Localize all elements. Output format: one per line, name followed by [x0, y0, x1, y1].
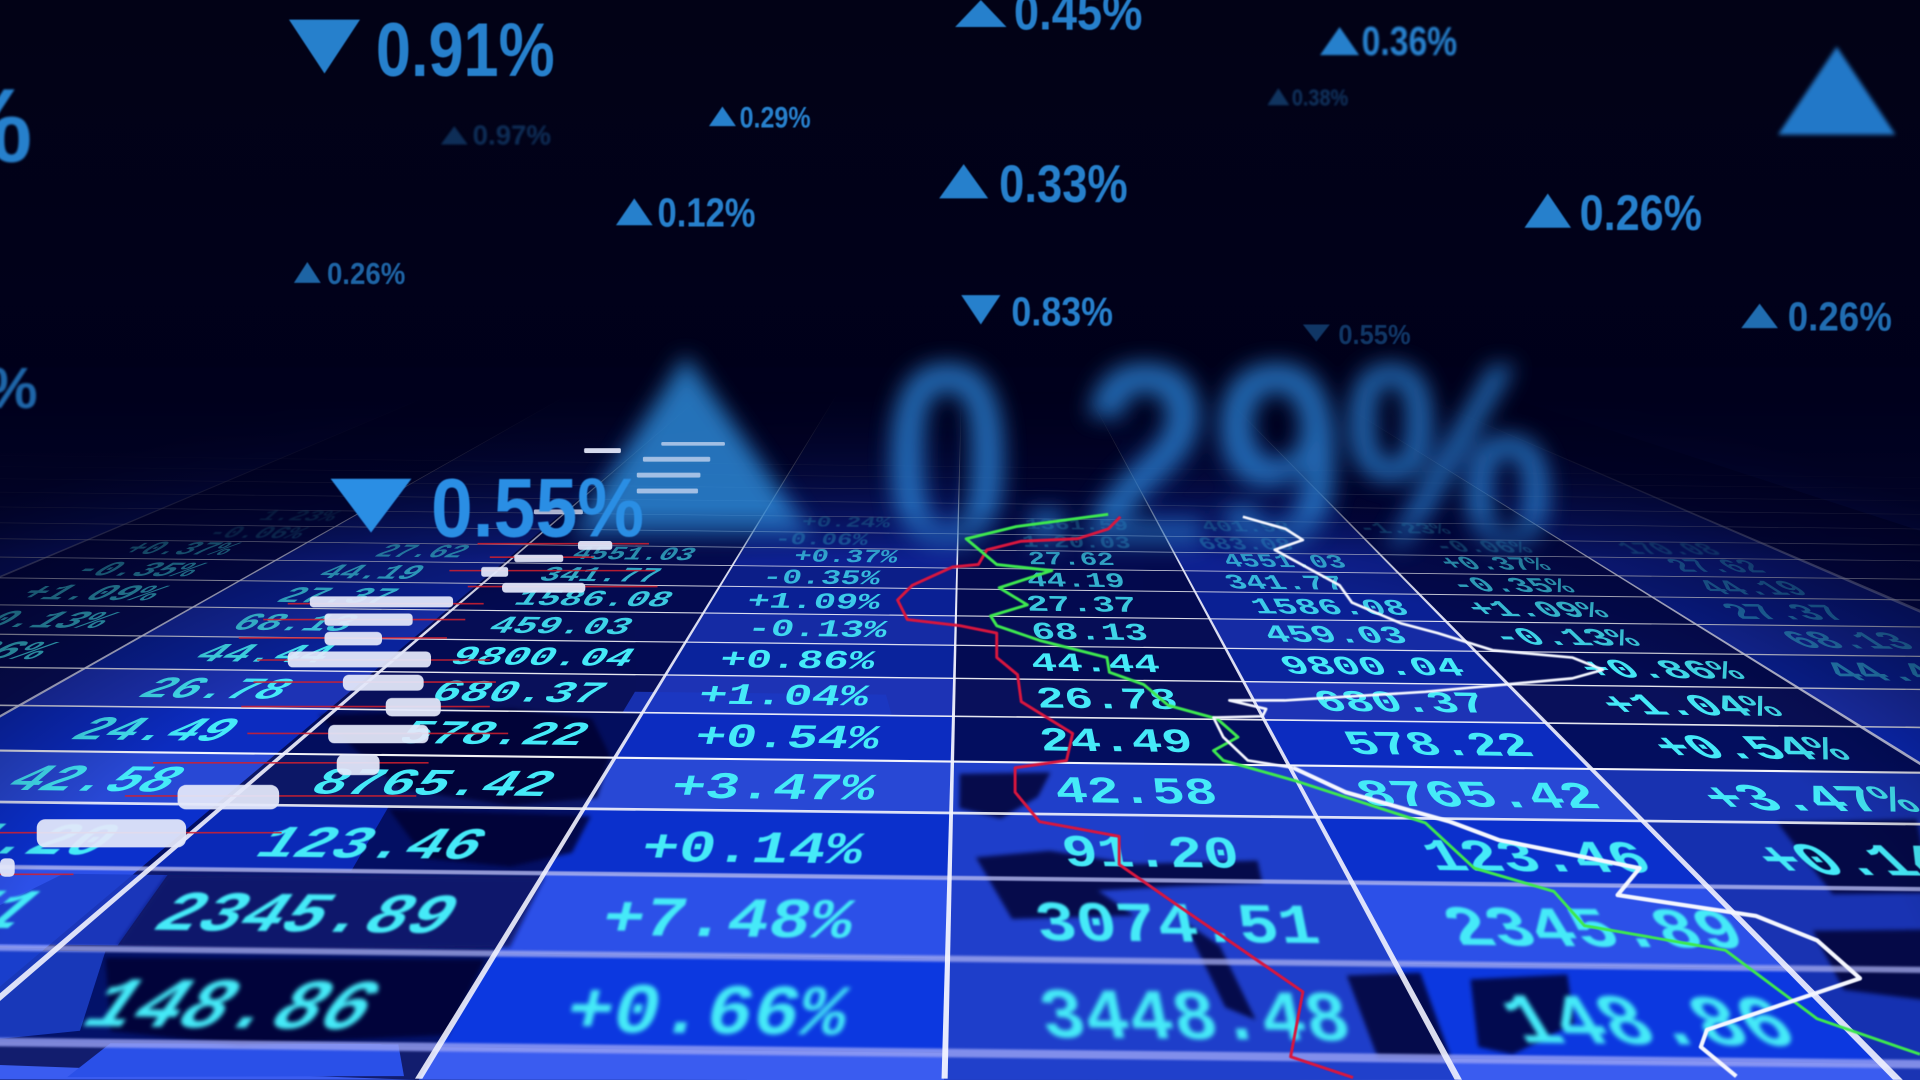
- faint table row: far rows: -0.06%: [773, 530, 871, 550]
- faint table row: far rows: -0.06%: [199, 523, 315, 544]
- table row: 68.13: 68.13: [220, 610, 368, 639]
- table row: 68.13: 68.13: [1029, 618, 1151, 648]
- table row: 44.44: 9800.04: [1274, 652, 1472, 684]
- table row: 3448.48: +0.66%: [557, 972, 857, 1056]
- giant blurred label: 0.29%: [565, 346, 1564, 562]
- alternating dark columns: [0, 442, 1920, 1080]
- table row: 91.20: 123.46: [242, 819, 500, 873]
- floating label: down 0.83%: 0.83%: [1011, 289, 1113, 335]
- world map: lighter land: [0, 684, 1920, 1080]
- table row: 44.44: 44.44: [1028, 648, 1163, 680]
- table row: 68.13: [0, 610, 1912, 650]
- table row: 44.19: 44.19: [1025, 569, 1127, 594]
- horizontal grid lines: [0, 451, 1920, 1069]
- floating label: up 0.26% far right: [1741, 294, 1892, 340]
- table row: 24.49: [71, 717, 1850, 760]
- faint table row: far rows: -0.06%: [1426, 537, 1540, 558]
- table row: 91.20: 123.46: [1412, 833, 1664, 887]
- floating label: large down 0.55%: [331, 461, 644, 554]
- floating label: faint up 0.97%: 0.97%: [473, 119, 551, 150]
- faint table row: far rows: 170.08: [1609, 540, 1732, 560]
- table row: 44.19: -0.35%: [1442, 574, 1583, 599]
- table row: 44.19: -0.35%: [760, 566, 883, 591]
- table row: 27.37: +1.09%: [1459, 597, 1618, 624]
- table row: 27.62: 27.62: [366, 541, 477, 563]
- table row: 24.49: +0.54%: [1640, 730, 1865, 771]
- table row: 44.19: 341.77: [1220, 571, 1351, 596]
- table row: 27.62: +0.37%: [792, 547, 900, 569]
- table row: 44.44: [0, 641, 1920, 681]
- table row: 42.58: 8765.42: [299, 763, 566, 808]
- table row: 68.13: 459.03: [1258, 622, 1414, 651]
- perspective data board: [0, 352, 1920, 1080]
- floating label: up 0.29%: [709, 101, 811, 134]
- floating label: up 0.26% far right: 0.26%: [1788, 294, 1892, 340]
- table row: 3448.48: 148.86: [1487, 984, 1815, 1068]
- floating label: faint down 0.55%: [1303, 319, 1411, 350]
- table row: 27.37: [27, 584, 1840, 620]
- floating label: faint up 0.38%: [1267, 84, 1348, 110]
- table row: 68.13: -0.13%: [1482, 624, 1651, 654]
- table row: 3448.48: 148.86: [62, 967, 399, 1050]
- table row: 44.19: [82, 562, 1805, 596]
- icon: large blurred up triangle: [1778, 47, 1896, 135]
- table row: 27.37: 27.37: [267, 583, 407, 610]
- edge vignette: [0, 367, 1920, 1080]
- floating label: down 0.91%: [289, 8, 555, 93]
- table row: 68.13: 459.03: [481, 613, 640, 642]
- perspective column lines: [0, 356, 1920, 1080]
- table row: 26.78: 680.37: [1306, 685, 1497, 722]
- world map: dark land: [104, 704, 1920, 1064]
- row bands: [0, 352, 1920, 1080]
- floating label: up 0.26% left: 0.26%: [327, 257, 405, 291]
- table row: 3074.51: [0, 889, 1740, 950]
- green chart line: [966, 514, 1920, 1054]
- floating label: up 0.36%: [1320, 18, 1457, 64]
- table row: 91.20: 91.20: [1058, 828, 1244, 881]
- table row: 24.49: +0.54%: [691, 719, 884, 759]
- table row: 42.58: [10, 765, 1920, 812]
- table row: 24.49: 24.49: [56, 712, 253, 751]
- faint table row: far rows: 401.98: [1198, 518, 1296, 537]
- table row: 27.62: 27.62: [1657, 556, 1777, 579]
- table row: 44.44: +0.86%: [717, 645, 879, 677]
- table row: 3448.48: [81, 976, 1794, 1050]
- floating label: up 0.26% center right: [1524, 185, 1702, 241]
- table row: 27.37: 1586.08: [1245, 594, 1415, 622]
- table row: 68.13: -0.13%: [744, 615, 891, 645]
- table row: 42.58: 8765.42: [1348, 775, 1610, 820]
- table row: 3074.51: +7.48%: [595, 889, 861, 956]
- floating label: up 0.33%: [939, 155, 1128, 214]
- table row: 27.37: 27.37: [1024, 592, 1139, 619]
- table row: 44.19: 44.19: [308, 561, 434, 585]
- floating label: up 0.26% center right: 0.26%: [1580, 185, 1702, 241]
- table row: 26.78: [138, 677, 1782, 716]
- faint table row: far rows: [214, 510, 1720, 556]
- faint table row: far rows: +0.24%: [800, 514, 893, 532]
- table row: 44.19: 44.19: [1686, 576, 1822, 602]
- faint table row: far rows: 1361.59: [1024, 517, 1130, 535]
- floating label: up 0.12%: 0.12%: [658, 190, 756, 236]
- table row: 27.62: 27.62: [1026, 549, 1117, 571]
- giant blurred label: 0.29%: 0.29%: [882, 308, 1555, 609]
- table row: 26.78: 26.78: [125, 672, 306, 708]
- floating label: up 0.12%: [616, 190, 756, 236]
- floating label: up 0.45%: [955, 0, 1142, 40]
- faint table row: far rows: 683.08: [1194, 535, 1298, 555]
- table row: 27.37: 1586.08: [507, 586, 680, 613]
- table row: 3074.51: 3074.51: [1030, 893, 1326, 961]
- floating label: large down 0.55%: 0.55%: [431, 461, 644, 554]
- faint table row: far rows: -1.23%: [1352, 521, 1459, 539]
- table row: 42.58: +3.47%: [667, 766, 881, 812]
- table row: 3074.51: 2345.89: [138, 883, 475, 950]
- table row: 3074.51: 2345.89: [1430, 898, 1761, 966]
- table row: 44.44: +0.86%: [1570, 655, 1756, 687]
- table row: 44.19: -0.35%: [59, 558, 215, 583]
- table row: 27.62: 4551.03: [1218, 551, 1352, 574]
- table row: 27.62: +0.37%: [1434, 554, 1559, 576]
- table row: 91.20: +0.14%: [636, 824, 869, 877]
- floating label: up 0.36%: 0.36%: [1362, 18, 1457, 64]
- candlestick wicks: [0, 544, 658, 874]
- table row: 27.62: 4551.03: [566, 543, 702, 566]
- table row: 27.37: +1.09%: [744, 589, 884, 616]
- table row: 44.44: 9800.04: [441, 642, 643, 674]
- table row: 26.78: +1.04%: [695, 679, 873, 715]
- table row: 44.19: 341.77: [533, 563, 667, 588]
- floating label: down 0.91%: 0.91%: [376, 8, 555, 93]
- faint table row: far rows: 1.23%: [251, 508, 346, 526]
- table row: 3448.48: 3448.48: [1033, 978, 1358, 1063]
- floating label: faint down 0.55%: 0.55%: [1338, 319, 1411, 350]
- table row: 27.62: +0.37%: [110, 538, 249, 561]
- floating label: up 0.29%: 0.29%: [740, 101, 811, 134]
- floating label: down 0.83%: [961, 289, 1113, 335]
- table row: 26.78: 680.37: [421, 676, 615, 712]
- table row: 24.49: 578.22: [388, 715, 599, 755]
- table row: 27.62: [129, 542, 1766, 572]
- table row: 24.49: 578.22: [1336, 726, 1543, 766]
- candlestick bars: [0, 442, 725, 877]
- floating label: up 0.26% left: [294, 257, 405, 291]
- table row: 91.20: [0, 822, 1920, 876]
- table row: 27.37: 27.37: [1711, 600, 1861, 627]
- floating label: up 0.33%: 0.33%: [999, 155, 1128, 214]
- white chart line: [1213, 517, 1860, 1076]
- red chart line: [898, 517, 1353, 1078]
- table row: 42.58: 42.58: [1051, 771, 1221, 816]
- table row: 27.37: +1.09%: [4, 581, 178, 607]
- table row: 24.49: 24.49: [1036, 723, 1197, 763]
- table row: 26.78: +1.04%: [1589, 689, 1795, 725]
- table row: 44.44: 44.44: [182, 640, 345, 671]
- faint table row: far rows: 1.20.03: [1021, 533, 1133, 554]
- floating label: faint up 0.38%: 0.38%: [1292, 84, 1348, 110]
- table row: 26.78: 26.78: [1033, 682, 1181, 718]
